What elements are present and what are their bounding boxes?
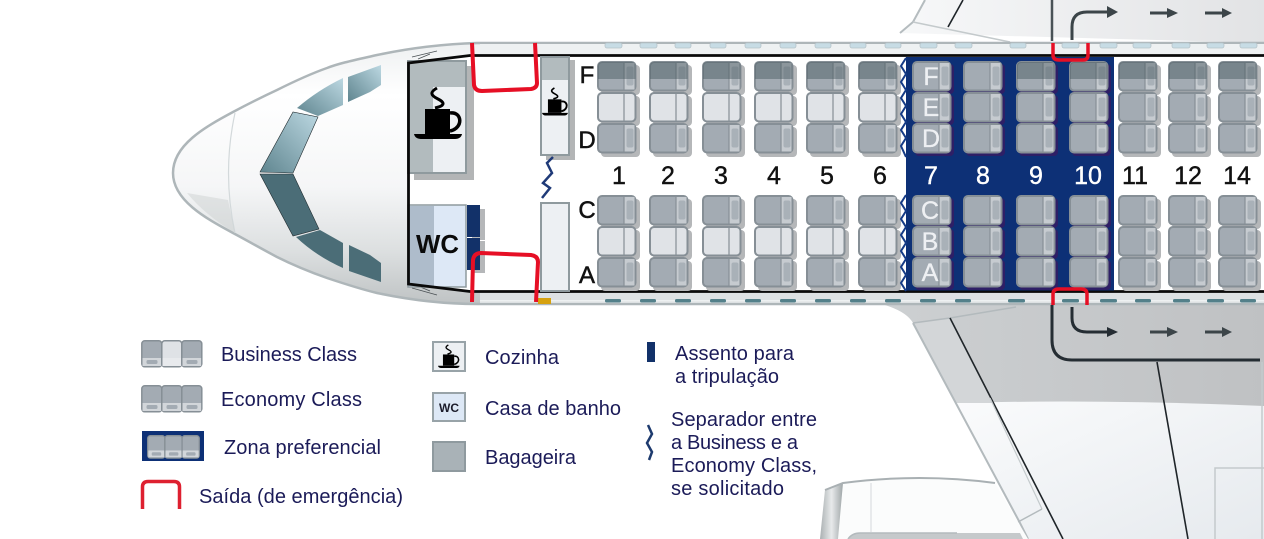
front lavatory [408,205,466,287]
seat letters: D [922,125,940,153]
rear galley upper [541,57,575,160]
row numbers: 8 [976,162,990,190]
zigzag class separator [901,58,906,291]
engine [820,478,1028,539]
cabin outline [408,56,1264,292]
seat letters: F [580,62,594,89]
preferential seats rows 7-10 [913,62,1111,290]
legend: preferential zone: Zona preferencial [224,437,381,459]
top wing [900,0,1264,43]
legend: galley: Cozinha [485,347,560,369]
class separator at galley [542,157,553,198]
legend: exit [142,482,403,509]
legend: lavatory: Casa de banho [485,398,621,420]
legend: crew seat: a tripulação [675,366,779,388]
legend: galley [433,342,560,371]
windows top row [605,43,1257,48]
seat letters: C [921,197,939,225]
seat letters [578,62,940,289]
seat letters: B [922,228,938,256]
seat letters: A [579,262,595,289]
legend: economy class [142,386,362,412]
row numbers: 1 [612,162,626,190]
row numbers: 9 [1029,162,1043,190]
exit bottom wing [1053,289,1087,305]
legend: class separator: Separador entre [671,409,817,431]
front galley [408,61,474,180]
yellow marker [538,298,551,304]
legend: preferential zone [142,431,381,461]
row numbers: 7 [924,162,938,190]
legend: baggage: Bagageira [485,447,577,469]
row numbers: 2 [661,162,675,190]
legend: class separator [647,409,817,500]
exit path bottom [1052,305,1260,360]
seat letters: E [923,94,939,122]
legend: business class: Business Class [221,344,357,366]
legend: lavatory [433,393,621,421]
row numbers: 4 [767,162,781,190]
cabin interior [408,56,1264,292]
row numbers: 11 [1122,162,1148,190]
door hatch marks [412,51,437,295]
preferential zone [906,57,1114,290]
rear galley lower [541,203,569,291]
fuselage [173,43,1264,304]
cockpit windows [260,65,381,282]
legend: economy class: Economy Class [221,389,362,411]
exit path top [1052,0,1232,41]
row numbers: 10 [1074,162,1102,190]
legend: baggage [433,442,577,471]
legend: class separator: se solicitado [671,478,784,500]
seat letters: D [578,127,596,154]
legend: crew seat: Assento para [675,343,795,365]
exit bottom left [472,253,538,302]
row numbers: 3 [714,162,728,190]
seat letters: A [922,259,939,287]
exit top left [472,43,537,91]
legend: class separator: Economy Class, [671,455,817,477]
seat letters: F [923,63,939,91]
row numbers: 14 [1223,162,1251,190]
legend: lavatory: WC [439,401,459,415]
legend: crew seat [647,342,795,388]
row numbers: 6 [873,162,887,190]
legend: exit: Saída (de emergência) [199,486,403,508]
seat letters: C [578,197,596,224]
row numbers: 12 [1174,162,1202,190]
economy seats rows 1-6 [598,62,901,291]
crew seats [467,205,485,273]
row numbers [612,162,1251,190]
row numbers: 5 [820,162,834,190]
legend: class separator: a Business e a [671,432,799,454]
windows bottom row [605,299,1256,302]
front lavatory: WC [416,229,459,259]
exit top wing [1053,43,1088,60]
bottom wing [885,303,1264,539]
legend: business class [142,341,357,367]
economy seats rows 11-14 [1119,62,1261,291]
